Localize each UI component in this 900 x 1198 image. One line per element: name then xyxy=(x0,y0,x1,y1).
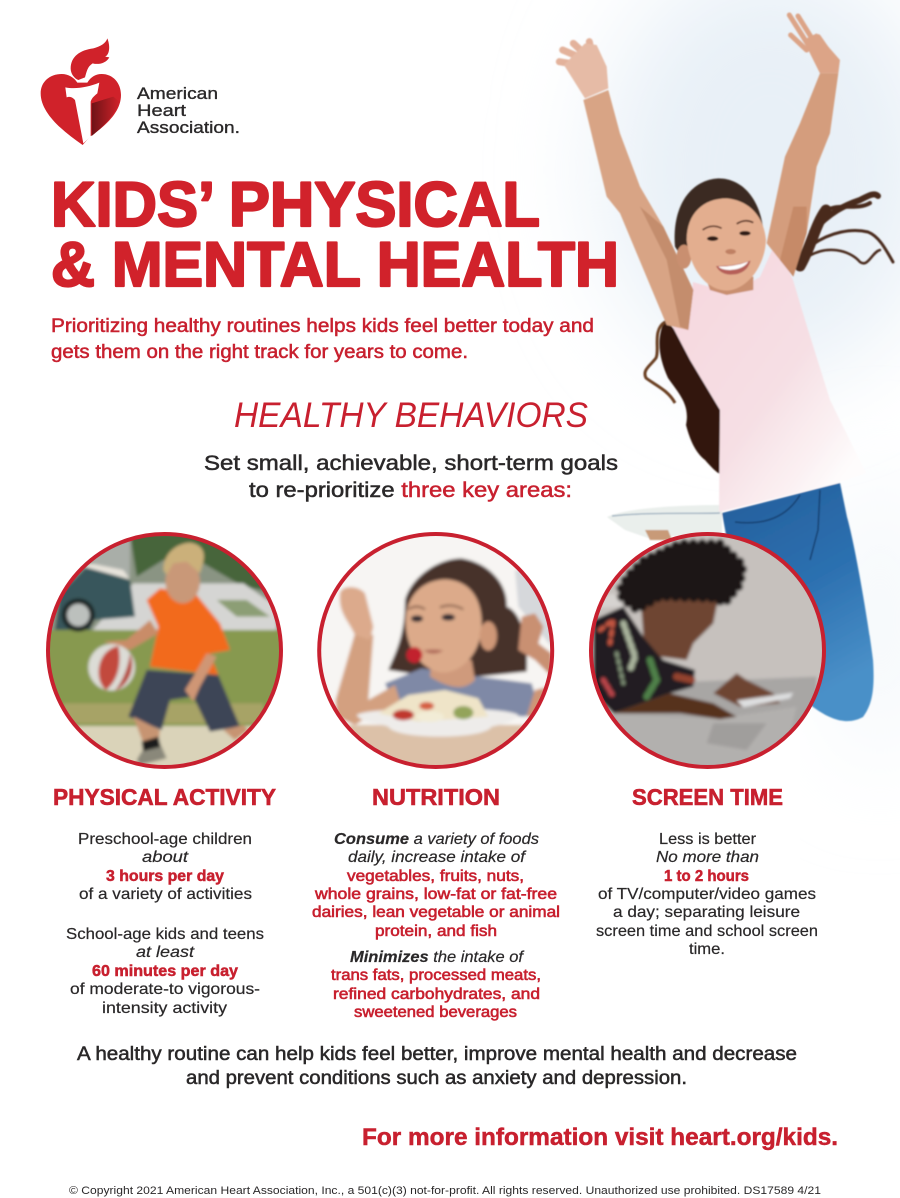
title: & MENTAL HEALTH xyxy=(51,230,619,300)
title xyxy=(51,170,619,300)
school-age guidance: intensity activity xyxy=(102,1000,227,1017)
consume guidance xyxy=(312,831,560,940)
column: physical activity xyxy=(53,784,276,1017)
subtitle xyxy=(51,316,594,363)
logo mark: heart and torch xyxy=(41,38,121,145)
consume guidance: Consume a variety of foods xyxy=(334,831,539,848)
consume guidance: vegetables, fruits, nuts, xyxy=(347,868,524,885)
call to action: website: For more information visit heart.org/kids. xyxy=(362,1124,838,1151)
school-age guidance: School-age kids and teens xyxy=(66,926,264,943)
arms and hands xyxy=(559,15,840,330)
screen time guidance xyxy=(596,831,818,958)
copyright: © Copyright 2021 American Heart Association, Inc., a 501(c)(3) not-for-profit. All rights reserved. Unauthorized use prohibited. DS17589 4/21 xyxy=(69,1185,821,1197)
heading: physical activity: PHYSICAL ACTIVITY xyxy=(53,784,276,810)
consume guidance: protein, and fish xyxy=(375,923,497,940)
closing statement: and prevent conditions such as anxiety and depression. xyxy=(186,1068,687,1089)
consume guidance: daily, increase intake of xyxy=(348,849,527,866)
closing statement xyxy=(77,1044,797,1089)
heading: nutrition: NUTRITION xyxy=(372,784,500,810)
preschool guidance xyxy=(78,831,252,903)
minimize guidance: sweetened beverages xyxy=(354,1004,517,1021)
screen time guidance: 1 to 2 hours xyxy=(664,868,749,885)
consume guidance: dairies, lean vegetable or animal xyxy=(312,904,560,921)
school-age guidance: of moderate-to vigorous- xyxy=(70,981,260,998)
shirt xyxy=(668,248,866,512)
school-age guidance: at least xyxy=(136,944,195,961)
school-age guidance: 60 minutes per day xyxy=(92,963,238,980)
shoe xyxy=(607,505,722,540)
preschool guidance: about xyxy=(142,849,189,866)
screen time guidance: time. xyxy=(689,941,725,958)
closing statement: A healthy routine can help kids feel better, improve mental health and decrease xyxy=(77,1044,797,1065)
screen time guidance: of TV/computer/video games xyxy=(598,886,816,903)
head xyxy=(675,178,763,260)
minimize guidance: refined carbohydrates, and xyxy=(333,986,540,1003)
intro text: to re-prioritize three key areas: xyxy=(249,479,572,502)
consume guidance: whole grains, low-fat or fat-free xyxy=(314,886,557,903)
minimize guidance: trans fats, processed meats, xyxy=(331,967,541,984)
logo wordmark: Heart xyxy=(137,101,186,120)
jeans xyxy=(722,483,874,721)
logo wordmark: Association. xyxy=(137,118,240,137)
logo: American Heart Association xyxy=(41,38,240,145)
flying hair xyxy=(800,194,893,266)
screen time guidance: a day; separating leisure xyxy=(613,904,800,921)
subtitle: gets them on the right track for years to come. xyxy=(51,342,468,363)
heading: healthy behaviors: HEALTHY BEHAVIORS xyxy=(234,396,588,435)
column: screen time xyxy=(596,784,818,958)
heading: screen time: SCREEN TIME xyxy=(632,784,783,810)
girl jumping photo xyxy=(559,15,893,721)
minimize guidance xyxy=(331,949,541,1021)
preschool guidance: 3 hours per day xyxy=(106,868,224,885)
intro text: Set small, achievable, short-term goals xyxy=(204,452,618,475)
screen time guidance: screen time and school screen xyxy=(596,923,818,940)
logo wordmark: American xyxy=(137,84,218,103)
screen time guidance: No more than xyxy=(656,849,759,866)
hair behind girl xyxy=(645,320,722,474)
preschool guidance: Preschool-age children xyxy=(78,831,252,848)
preschool guidance: of a variety of activities xyxy=(79,886,252,903)
screen time guidance: Less is better xyxy=(659,831,757,848)
logo wordmark xyxy=(137,84,240,137)
subtitle: Prioritizing healthy routines helps kids feel better today and xyxy=(51,316,594,337)
minimize guidance: Minimizes the intake of xyxy=(350,949,525,966)
photo: boy dribbling basketball xyxy=(46,532,283,769)
photo: girl eating fruit xyxy=(317,532,554,769)
column: nutrition xyxy=(312,784,560,1021)
school-age guidance xyxy=(66,926,264,1017)
photo: boy using tablet xyxy=(589,532,826,769)
intro text xyxy=(204,452,618,502)
title: KIDS’ PHYSICAL xyxy=(51,170,540,240)
